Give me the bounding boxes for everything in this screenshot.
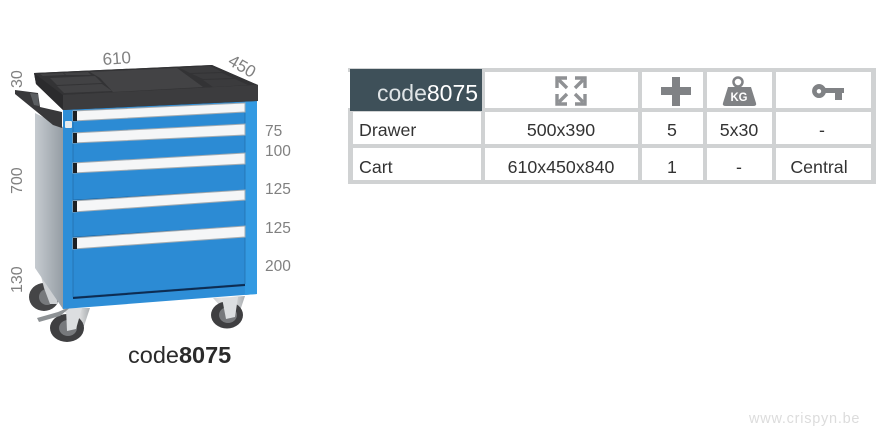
- drawer 125: 125: [265, 220, 291, 237]
- top tray: [34, 65, 258, 110]
- drawer handles: [73, 103, 245, 249]
- wheel: rear right: [211, 296, 245, 328]
- depth 450: 450: [225, 51, 259, 82]
- label Cart: Cart: [359, 157, 393, 177]
- header code cell: code8075: [377, 80, 478, 106]
- height 130: 130: [9, 266, 26, 293]
- product code caption: code8075: [128, 342, 231, 368]
- drawer 100: 100: [265, 143, 291, 160]
- header code cell: [350, 69, 482, 111]
- value dash: -: [736, 157, 742, 177]
- icon: dimensions arrows: [557, 78, 585, 104]
- table grid: [348, 68, 876, 184]
- icon: plus quantity: [661, 77, 691, 106]
- wheel: front left with brake: [37, 306, 90, 342]
- height 30: 30: [9, 70, 26, 88]
- icon: weight KG: [723, 78, 756, 106]
- row: Cart: [359, 157, 848, 177]
- watermark: www.crispyn.be: [748, 411, 860, 427]
- drawer fronts: [73, 103, 245, 297]
- wheel: rear left: [29, 272, 59, 311]
- value 5: 5: [667, 120, 677, 140]
- lock: [65, 121, 72, 128]
- height 700: 700: [9, 167, 26, 194]
- value Central: Central: [790, 157, 848, 177]
- drawer 200: 200: [265, 258, 291, 275]
- row: Drawer: [359, 120, 825, 140]
- drawer 75: 75: [265, 123, 282, 140]
- width 610: 610: [102, 48, 132, 69]
- value 5x30: 5x30: [720, 120, 758, 140]
- label Drawer: Drawer: [359, 120, 416, 140]
- value 500x390: 500x390: [527, 120, 595, 140]
- cart side panel: [35, 113, 63, 309]
- drawer 125: 125: [265, 181, 291, 198]
- spec table: [348, 68, 876, 184]
- value dash: -: [819, 120, 825, 140]
- cart illustration: [15, 65, 258, 342]
- value 610x450x840: 610x450x840: [508, 157, 614, 177]
- value 1: 1: [667, 157, 677, 177]
- dimension labels: [9, 48, 291, 293]
- icon: key: [812, 84, 844, 100]
- cart front body: [63, 100, 257, 309]
- side handle: [15, 90, 62, 128]
- icon: weight KG: KG: [730, 90, 748, 104]
